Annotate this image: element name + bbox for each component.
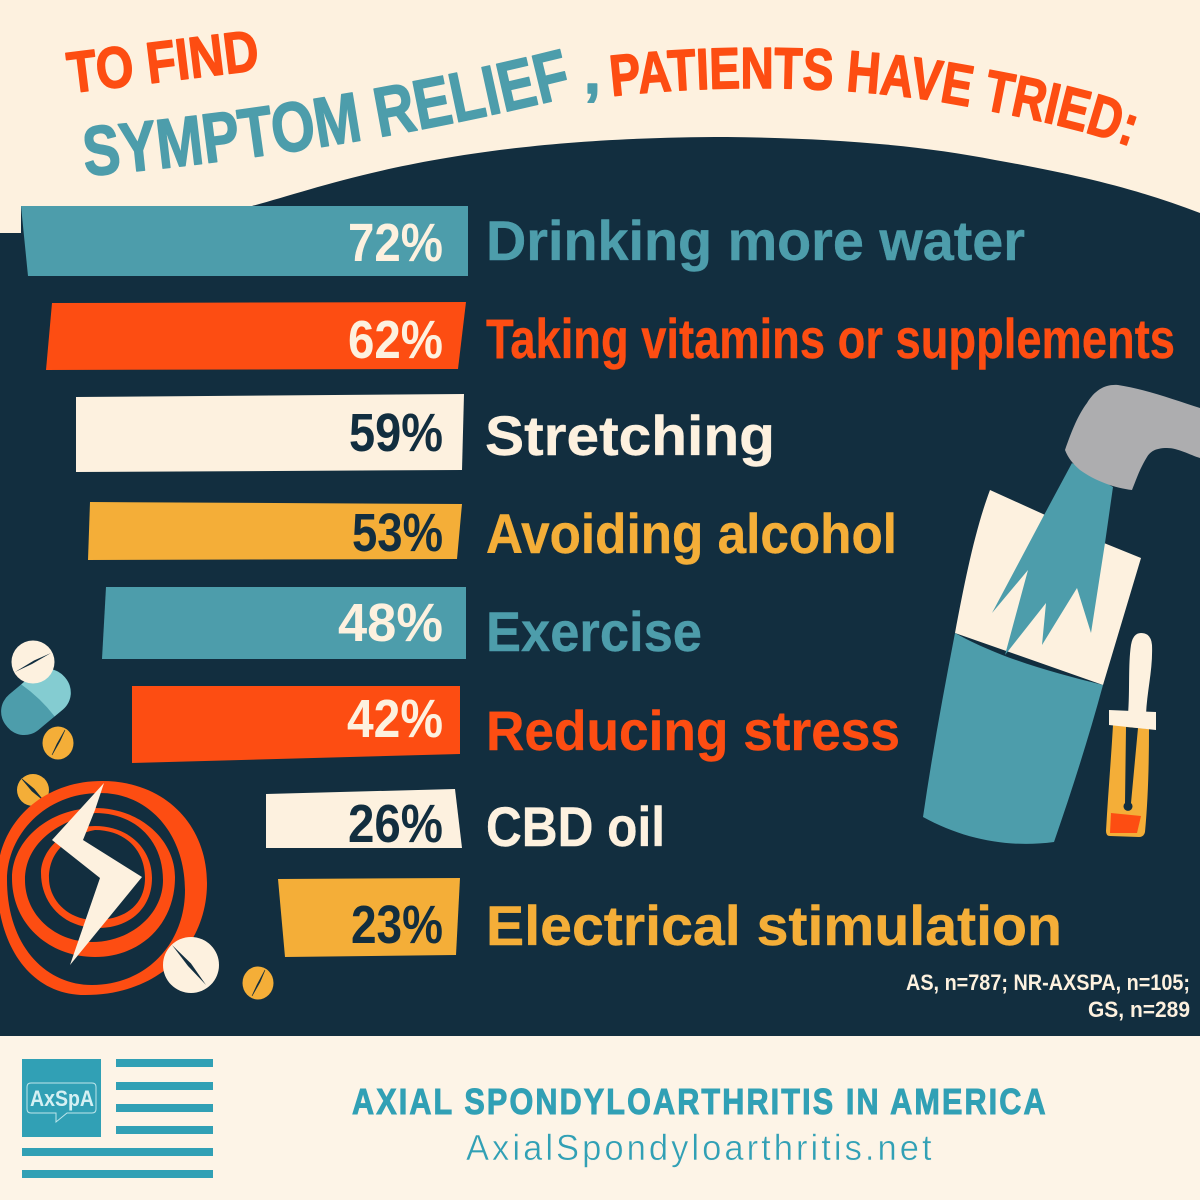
footer band (0, 1036, 1200, 1200)
title comma: , (584, 39, 601, 106)
faucet (1065, 385, 1200, 490)
logo: AxSpA flag: AxSpA (30, 1086, 94, 1111)
bar: avoiding alcohol 53%: 53% (352, 503, 443, 563)
bar: taking vitamins or supplements 62% (46, 302, 1175, 370)
white pill (163, 937, 219, 993)
glass (955, 490, 1141, 685)
bar: avoiding alcohol 53% (88, 502, 897, 565)
bar: drinking more water 72%: Drinking more water (486, 209, 1025, 272)
title line: patients have tried: PATIENTS HAVE TRIED: (610, 47, 1136, 146)
spiral (0, 781, 207, 995)
logo: AxSpA flag (22, 1059, 213, 1178)
bar: exercise 48% (102, 587, 702, 663)
bar: reducing stress 42% (132, 686, 900, 763)
sample size note (906, 970, 1190, 1022)
icon: pills (0, 640, 80, 806)
bar: reducing stress 42%: 42% (347, 689, 443, 749)
dropper bulb (1128, 633, 1152, 715)
footer url: AxialSpondyloarthritis.net (466, 1128, 932, 1168)
bar: CBD oil 26% (266, 789, 665, 858)
white pill (12, 640, 54, 684)
title line: symptom relief: SYMPTOM RELIEF (84, 48, 567, 176)
bar: stretching 59% (76, 394, 775, 472)
lightning bolt (52, 783, 142, 965)
bar: reducing stress 42%: Reducing stress (486, 699, 900, 762)
bar chart (21, 206, 1175, 957)
sample size note: GS, n=289 (1088, 997, 1190, 1022)
bar: avoiding alcohol 53%: Avoiding alcohol (486, 502, 897, 565)
yellow pill (17, 774, 49, 806)
pipette (1124, 727, 1138, 811)
icon: faucet filling a glass (923, 385, 1200, 844)
bar: exercise 48%: 48% (338, 593, 443, 653)
bar: exercise 48%: Exercise (486, 600, 702, 663)
bar: electrical stimulation 23%: Electrical stimulation (486, 894, 1062, 957)
bar: electrical stimulation 23% (278, 878, 1062, 957)
dropper collar (1109, 710, 1156, 730)
yellow pill (242, 966, 274, 1000)
bar: CBD oil 26%: 26% (348, 794, 443, 854)
bar: stretching 59%: Stretching (485, 404, 775, 467)
footer title: AXIAL SPONDYLOARTHRITIS IN AMERICA (352, 1083, 1046, 1123)
bar: drinking more water 72%: 72% (348, 213, 443, 273)
dropper bottle (1106, 725, 1149, 837)
icon: pain spiral with lightning bolt (0, 781, 207, 995)
icon: oil dropper (1106, 633, 1156, 837)
oil level (1110, 813, 1141, 833)
icon: pills beside spiral (163, 937, 274, 1000)
bar: taking vitamins or supplements 62%: 62% (348, 310, 443, 370)
bar: CBD oil 26%: CBD oil (486, 795, 665, 858)
speech bubble (27, 1083, 96, 1122)
bar: stretching 59%: 59% (349, 403, 443, 463)
title line: to find: TO FIND (64, 18, 262, 106)
glass water (923, 633, 1103, 844)
yellow pill (42, 726, 74, 760)
capsule (0, 660, 80, 744)
water stream (992, 463, 1113, 655)
bar: drinking more water 72% (21, 206, 1025, 276)
bar: electrical stimulation 23%: 23% (351, 895, 443, 955)
title (64, 18, 1136, 176)
navy panel with curved top (0, 137, 1200, 1036)
